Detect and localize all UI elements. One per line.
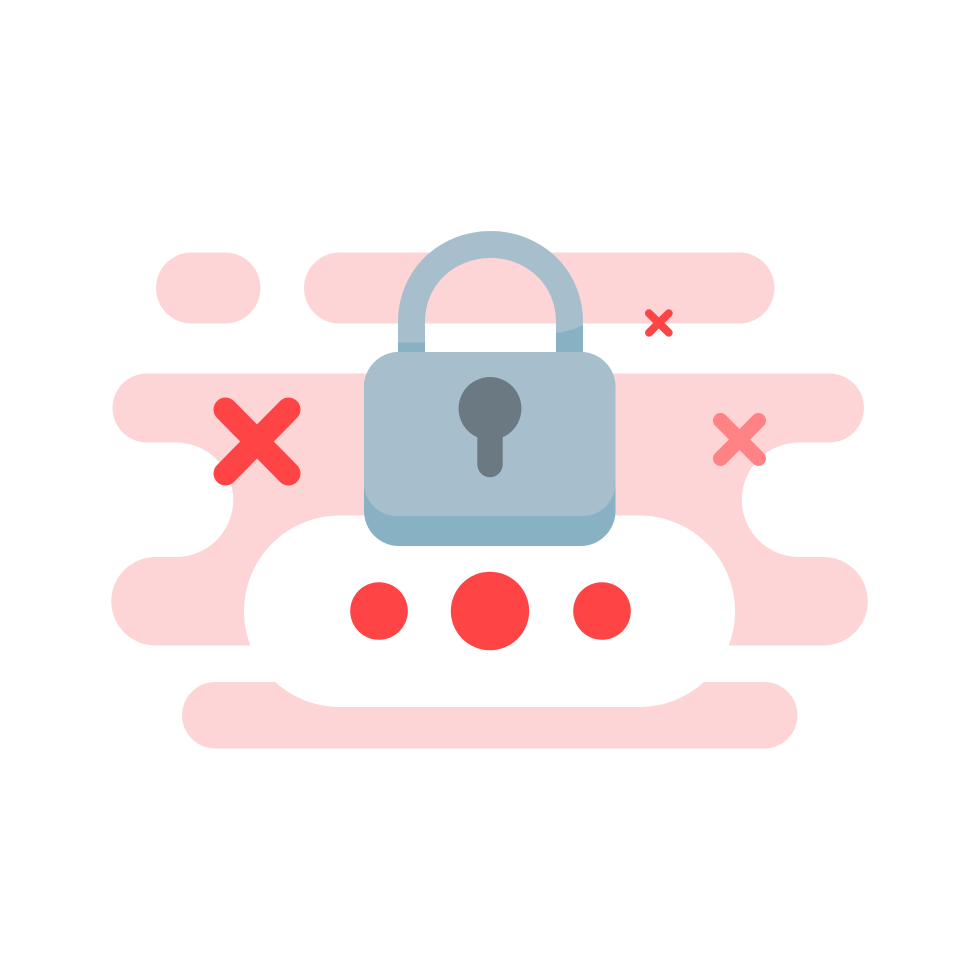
icon: padlock [364, 244, 616, 546]
icon: large red cross [226, 410, 288, 474]
icon: light red cross [720, 420, 758, 458]
shackle shadow bands [398, 325, 583, 354]
padlock body highlight [364, 352, 616, 516]
padlock body [364, 352, 616, 546]
keyhole [459, 377, 521, 477]
padlock shackle [412, 244, 570, 356]
icon: small red cross [649, 313, 669, 333]
background: pink cloud shapes [111, 252, 868, 748]
password dots [350, 572, 631, 650]
panel: white password field [244, 516, 735, 707]
